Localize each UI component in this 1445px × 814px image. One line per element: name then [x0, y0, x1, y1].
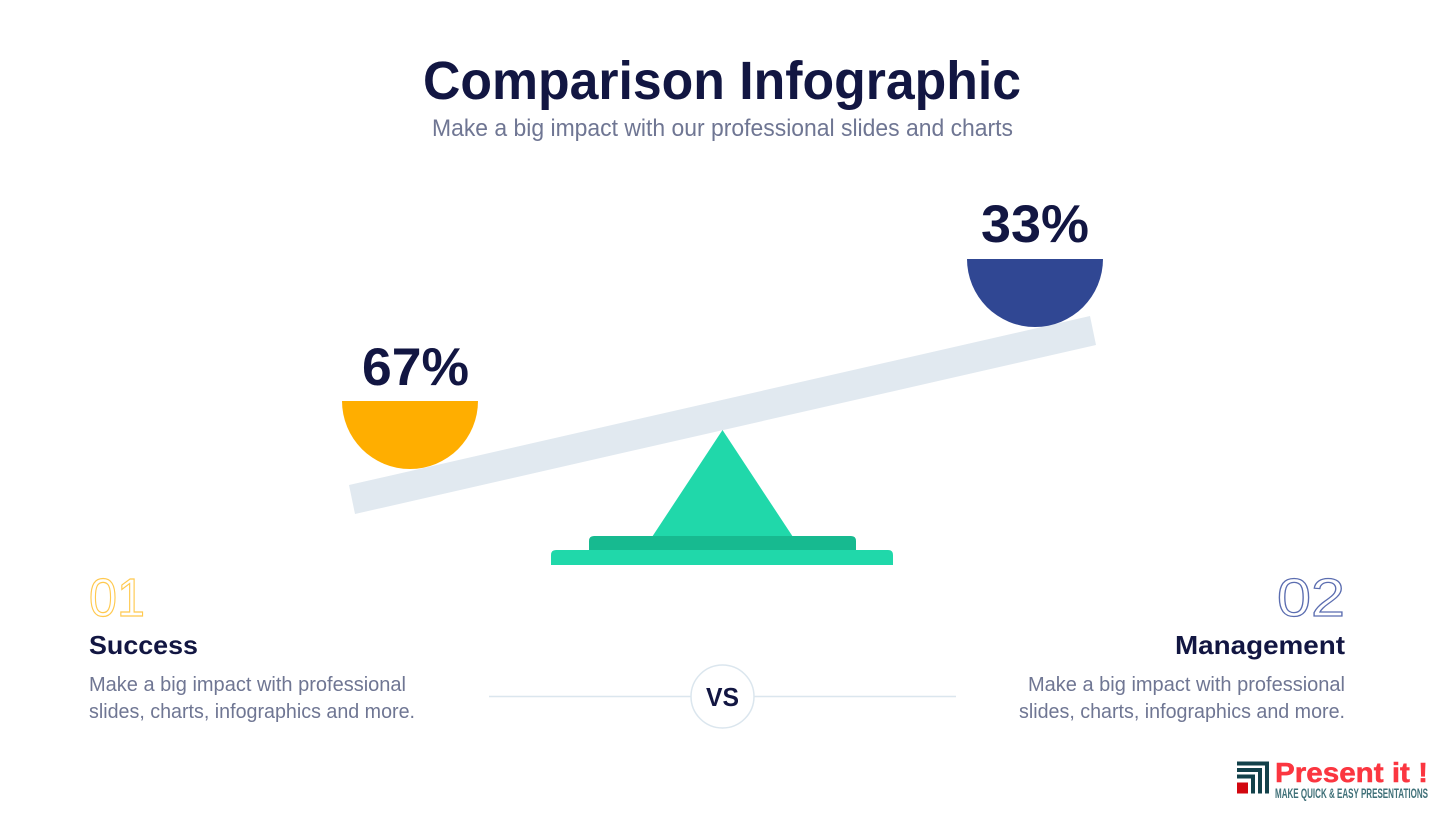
value: 33%: 33%	[981, 195, 1089, 254]
upper base	[589, 536, 856, 551]
divider line	[489, 696, 956, 698]
logo wordmark: Present it !	[1275, 757, 1428, 788]
seesaw plank	[349, 316, 1096, 514]
bowl: 67% amber	[342, 401, 478, 469]
number 01: 01	[89, 568, 145, 628]
heading: Success: Success	[89, 630, 198, 660]
logo: Present it	[1237, 757, 1428, 801]
text block: Management description: slides, charts, infographics and more.	[1019, 701, 1345, 723]
number 02: 02	[1277, 568, 1345, 628]
text block: Management description: Make a big impact with professional	[1028, 674, 1345, 696]
subtitle: Make a big impact with our professional slides and charts	[432, 115, 1013, 142]
vs badge: VS	[706, 682, 739, 712]
text block: Success description	[89, 674, 415, 723]
heading: Management: Management	[1175, 630, 1345, 660]
logo icon	[1237, 762, 1269, 794]
title: Comparison Infographic	[423, 51, 1021, 111]
fulcrum triangle	[652, 430, 793, 537]
value: 67%: 67%	[362, 338, 469, 397]
text block: Success description: Make a big impact with professional	[89, 674, 406, 696]
lower base	[551, 550, 893, 565]
fulcrum stand	[551, 430, 893, 565]
text block: Management description	[1019, 674, 1345, 723]
vs badge	[691, 665, 754, 728]
text block: Success description: slides, charts, infographics and more.	[89, 701, 415, 723]
bowl: 33% blue	[967, 259, 1103, 327]
